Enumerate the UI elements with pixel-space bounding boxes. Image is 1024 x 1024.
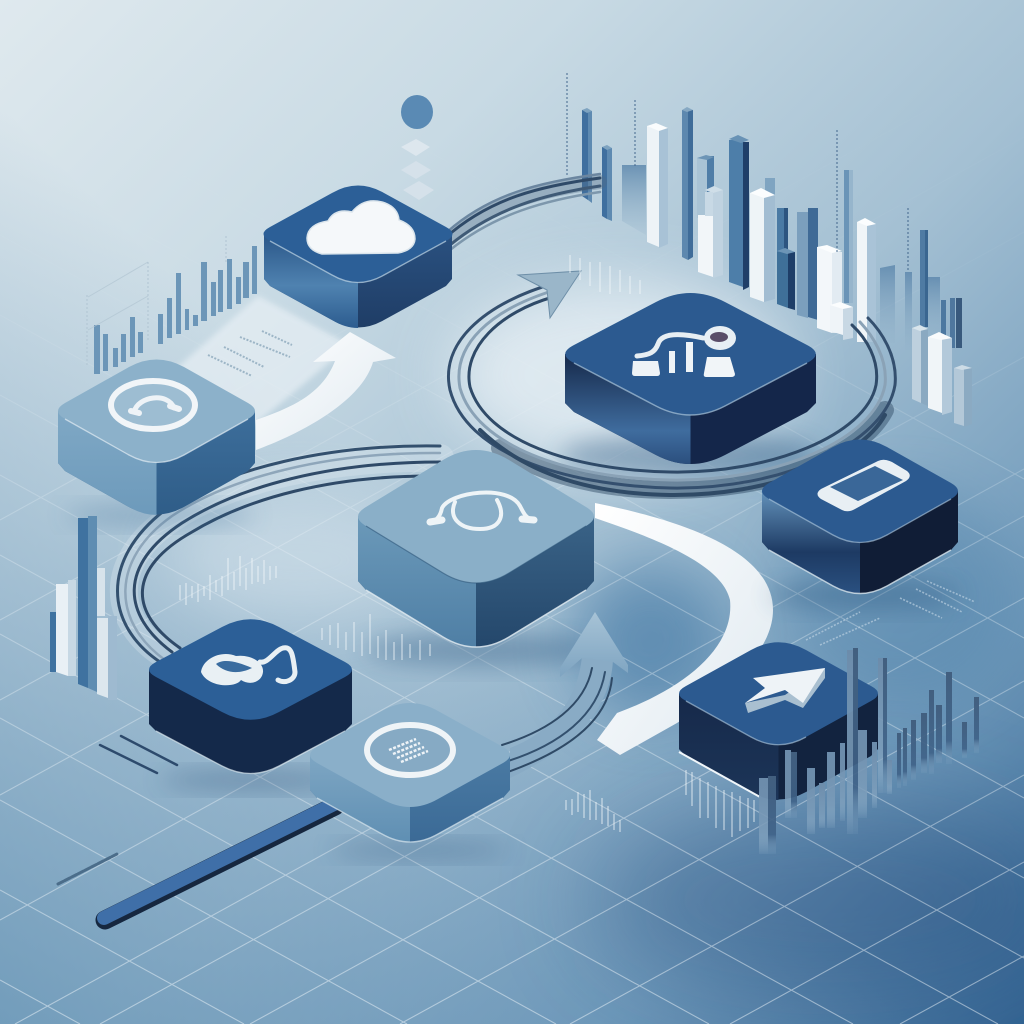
large white curved arrow	[595, 503, 773, 755]
top edge highlight	[686, 701, 806, 745]
top edge highlight	[366, 526, 586, 583]
up-pointing blue arrow with trailing lines	[502, 612, 628, 778]
long slider bar	[104, 804, 335, 920]
base highlight	[317, 798, 503, 842]
small pseudo-text labels	[208, 331, 292, 376]
icon: omega headset	[430, 493, 534, 529]
block: left light node	[58, 360, 255, 525]
arrow body	[510, 655, 613, 778]
block: arrow node	[679, 642, 878, 800]
right side	[565, 354, 816, 464]
top face	[58, 360, 255, 462]
icon: head and link	[201, 648, 295, 685]
ring arcs around big block, ending in an arrowhead	[448, 271, 895, 495]
bar chart: left small	[50, 516, 117, 700]
bar chart: front right	[759, 648, 979, 854]
top face	[358, 450, 594, 583]
block: center process node	[358, 450, 595, 666]
left side	[679, 694, 778, 800]
left side	[58, 411, 156, 515]
right side	[679, 694, 878, 800]
base highlight	[156, 731, 345, 774]
faint wave charts	[180, 255, 754, 837]
block: phone node	[762, 440, 960, 609]
left side	[358, 516, 476, 647]
icon: ring with text lines	[367, 725, 453, 775]
white curved arrow from left block	[256, 332, 396, 450]
top face	[679, 642, 878, 745]
icon: smartphone	[818, 460, 910, 511]
icon: ring with headset	[111, 381, 195, 429]
left side	[310, 755, 410, 842]
dotted guide lines	[567, 73, 908, 270]
top edge highlight	[574, 363, 807, 415]
right side	[264, 234, 452, 328]
light floor panel under left chart	[100, 296, 350, 436]
icon: arrowhead	[518, 271, 581, 318]
stacked icon: circle and small tiles	[401, 95, 434, 200]
upper arc connecting cloud block to the chart	[445, 174, 600, 250]
left side	[565, 354, 690, 464]
floor grid	[0, 357, 1024, 1024]
arrow head	[560, 612, 628, 677]
block: dark lower-left node	[149, 619, 352, 789]
right side	[310, 755, 510, 842]
icon: cloud	[307, 201, 415, 254]
trailing lines	[502, 668, 612, 773]
base highlight	[769, 550, 951, 594]
right side	[762, 491, 958, 594]
top face	[565, 293, 816, 415]
base highlight	[679, 752, 760, 797]
top face	[762, 440, 958, 542]
base highlight	[366, 590, 586, 647]
block: cloud node	[264, 186, 452, 328]
left side	[762, 491, 860, 593]
bar chart: upper left	[94, 246, 257, 374]
top edge highlight	[769, 499, 951, 542]
icon: network flow	[632, 326, 736, 377]
block: light bottom node	[310, 703, 510, 858]
top face	[149, 619, 352, 720]
top face	[264, 186, 452, 282]
faint label dashes right	[806, 581, 975, 645]
top face	[310, 703, 510, 807]
bar chart: right skyline	[567, 73, 972, 427]
icon: paper plane arrow	[745, 668, 825, 713]
top edge highlight	[65, 419, 248, 462]
shadow	[365, 634, 595, 666]
lower ring arcs looping around center block	[118, 446, 440, 662]
small dash lines	[58, 736, 177, 884]
right side	[58, 411, 255, 514]
top edge highlight	[270, 241, 446, 282]
block: big dark process node	[560, 293, 820, 477]
right side	[358, 516, 594, 647]
left side	[264, 234, 358, 328]
side	[149, 670, 352, 774]
chart guide lines	[87, 236, 226, 365]
